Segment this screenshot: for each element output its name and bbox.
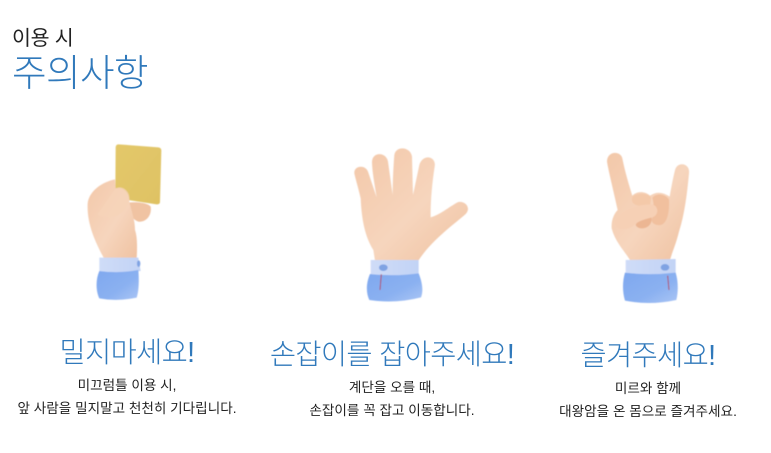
icon: hand holding yellow card bbox=[87, 144, 162, 300]
card bbox=[115, 144, 161, 204]
description: 대왕암을 온 몸으로 즐겨주세요. bbox=[559, 404, 737, 419]
description: 미르와 함께 bbox=[615, 381, 681, 396]
description bbox=[18, 378, 236, 416]
description: 미끄럼틀 이용 시, bbox=[78, 378, 176, 393]
description: 계단을 오를 때, bbox=[349, 380, 435, 395]
heading: 즐겨주세요! bbox=[581, 340, 715, 372]
description bbox=[309, 380, 475, 418]
heading: 주의사항 bbox=[12, 52, 148, 94]
description bbox=[559, 381, 737, 419]
description: 손잡이를 꼭 잡고 이동합니다. bbox=[309, 403, 475, 418]
panel: do not push bbox=[18, 144, 236, 416]
panel: enjoy bbox=[559, 152, 737, 419]
title: 이용 시 주의사항 bbox=[12, 27, 148, 94]
heading: 손잡이를 잡아주세요! bbox=[270, 339, 514, 371]
heading: 밀지마세요! bbox=[60, 337, 194, 369]
icon: rock hand sign bbox=[606, 152, 690, 304]
description: 앞 사람을 밀지말고 천천히 기다립니다. bbox=[18, 401, 236, 416]
subheading: 이용 시 bbox=[12, 27, 73, 50]
panel: hold the handrail bbox=[270, 148, 514, 418]
icon: open hand bbox=[354, 148, 468, 302]
